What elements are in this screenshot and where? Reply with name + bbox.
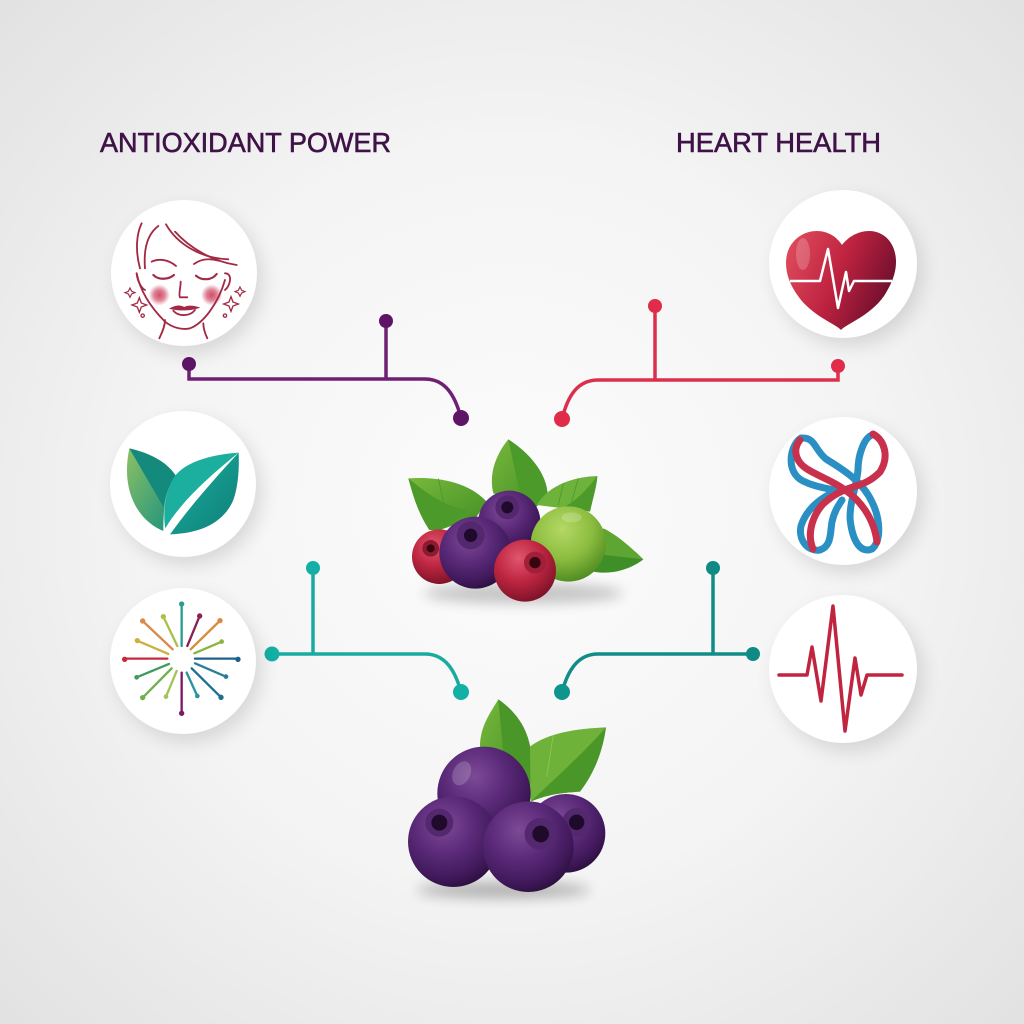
- icon: face: [125, 223, 245, 338]
- panel: pulse icon: [769, 595, 922, 750]
- title: heart health: HEART HEALTH: [676, 127, 881, 158]
- panel: heart icon: [769, 190, 922, 345]
- icon: teal leaves: [127, 448, 239, 534]
- green berry: [531, 506, 606, 582]
- illustration: purple acai berries: [408, 699, 606, 898]
- red berry front: [494, 540, 556, 602]
- connector: red: [554, 299, 845, 427]
- icon: colourful burst: [122, 601, 241, 716]
- purple berry top: [478, 491, 540, 553]
- icon: heartbeat line: [779, 606, 902, 731]
- icon: chromosome loops: [791, 434, 885, 550]
- purple berry front: [439, 517, 511, 589]
- berry front: [483, 801, 574, 892]
- berry top: [437, 747, 531, 840]
- panel: chromosome icon: [769, 417, 922, 572]
- panel: leaf icon: [110, 411, 261, 564]
- leaves: [480, 699, 606, 802]
- panel: skin icon: [111, 200, 262, 353]
- leaves: [408, 439, 643, 573]
- berry left: [408, 796, 499, 887]
- title: antioxidant power: ANTIOXIDANT POWER: [100, 127, 391, 158]
- berry back right: [527, 794, 605, 873]
- red berry left: [412, 529, 467, 584]
- illustration: mixed acai berries: [408, 439, 643, 603]
- icon: heart with pulse: [786, 231, 896, 330]
- panel: burst icon: [110, 588, 261, 741]
- connector: teal right: [554, 561, 760, 700]
- connector: purple: [182, 314, 469, 426]
- connector: teal left: [264, 561, 469, 700]
